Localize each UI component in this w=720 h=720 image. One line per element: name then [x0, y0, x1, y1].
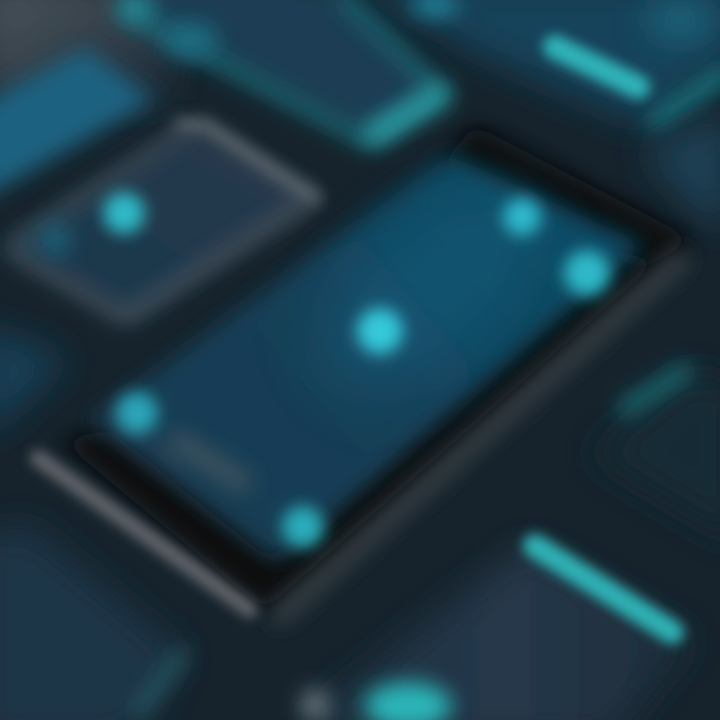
phone: lower left: [0, 525, 185, 720]
phone: top centre teal frame: [115, 0, 440, 140]
bar: teal edge highlight: [375, 95, 440, 135]
phone: left edge lower: [0, 325, 70, 440]
bar: teal bottom blob: [364, 682, 452, 720]
bar: grey text line: [178, 442, 242, 482]
phone: far right dark edge: [640, 110, 720, 230]
phone: lower right: [301, 545, 695, 720]
frame: grey corner: [301, 689, 329, 720]
frame: grey lower right edge: [275, 255, 685, 620]
bar: teal frame edge: [135, 650, 185, 715]
phone: central: [38, 125, 695, 620]
frame: left grey edge: [10, 130, 185, 245]
frame: teal outline: [130, 0, 440, 140]
frame: grey lower left edge: [38, 458, 250, 610]
frame: outer dark lower body: [60, 250, 660, 610]
icon: glowing dot left phone: [103, 192, 145, 234]
screen: [90, 155, 645, 560]
icon: left dot: [116, 392, 158, 434]
glow: screen centre: [285, 153, 575, 427]
phone: upper left blue: [0, 48, 155, 200]
bar: teal edge: [620, 368, 690, 412]
phone: left grey frame: [5, 125, 320, 320]
icon: upper dot: [503, 198, 541, 236]
phone: top right: [350, 0, 720, 125]
icon: right dot: [564, 250, 610, 296]
phone: right middle: [590, 368, 720, 545]
icon: bottom dot: [282, 506, 324, 548]
bar: teal frame edge: [650, 70, 720, 125]
frame: top right grey edge: [180, 125, 315, 198]
bar: teal button: [555, 47, 638, 87]
bar: teal button: [535, 546, 672, 632]
icon: central dot: [357, 308, 403, 354]
frame: bottom grey edge: [10, 200, 310, 318]
frame: upper right black band: [440, 125, 695, 270]
